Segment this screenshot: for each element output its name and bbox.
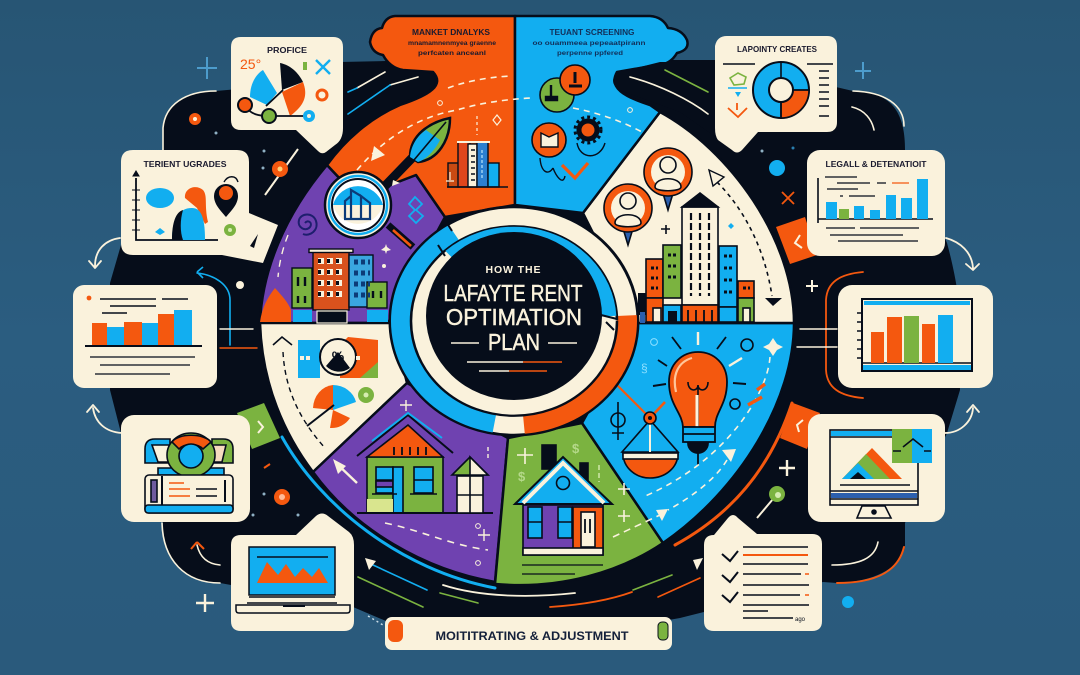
segment: purple bottom — [313, 383, 508, 582]
icon: decorative plus marks and dots — [189, 57, 871, 612]
icon: green panel sparkles — [517, 441, 668, 537]
title underline rules — [451, 343, 577, 371]
hub rings — [380, 198, 648, 444]
panel: laptop card — [231, 514, 354, 631]
heading: market analysis tab: mnamamnenmyea graenne — [408, 41, 497, 47]
panel: right bar chart card — [838, 285, 993, 388]
icon: leaf with stem — [385, 118, 450, 186]
screen chart — [857, 299, 972, 371]
hub centre disc — [426, 232, 602, 400]
icon: scale — [611, 385, 678, 478]
icon: spiral — [299, 214, 317, 235]
icon: dark blobs overlapping the tabs — [340, 62, 720, 150]
black arcs detail — [162, 91, 904, 607]
segment: purple upper left — [260, 165, 445, 323]
title: optimation: OPTIMATION — [446, 304, 582, 330]
icon: bottom arc arrowheads — [191, 267, 703, 625]
monitor icon — [830, 429, 932, 518]
title: plan: PLAN — [488, 329, 540, 355]
heading: market analysis tab: perfcaten anceanl — [418, 51, 486, 57]
icon: lower-left cream panel pie and badge: % — [332, 348, 345, 364]
segment: cream lower left — [260, 323, 407, 472]
icon: dashed path on orange and blue — [357, 76, 642, 170]
checks — [722, 551, 738, 602]
panel: checklist card: ago — [795, 617, 806, 623]
icon: dashed arrows on blue panel — [641, 338, 783, 510]
icon: dashed arrows on blue panel: § — [641, 361, 648, 375]
icon: cream panel people and tower — [604, 148, 754, 323]
icon: dashed arrow on cream — [661, 170, 782, 306]
heading: tenant screening tab: oo ouammeea pepeaatpirann — [532, 41, 646, 47]
panel: central hub — [380, 198, 648, 444]
heading: tenant screening tab: TEUANT SCREENING — [550, 27, 635, 37]
heading: market analysis tab — [408, 27, 497, 57]
heading: profile: PROFICE — [267, 46, 308, 55]
icon: tenant screening symbols — [438, 65, 632, 181]
panel: wheel segments — [260, 16, 794, 585]
panel: profile card — [231, 37, 343, 153]
heading: MOITITRATING & ADJUSTMENT — [436, 629, 629, 643]
panel: monitor card — [808, 414, 945, 522]
heading: LAPOINTY CREATES — [737, 44, 817, 54]
icon: lower-left cream panel pie and badge — [273, 337, 378, 448]
panel: left bar chart card — [73, 285, 217, 388]
icon: road lines on dark blobs — [348, 70, 708, 114]
icon: light bulb — [653, 332, 753, 465]
icon: purple panel buildings — [260, 249, 388, 323]
icon: purple panel dashed arrow — [333, 400, 490, 565]
icon: connector tabs — [237, 217, 820, 449]
icon: buildings on orange — [447, 142, 508, 187]
panel: budget card lower left — [121, 415, 250, 522]
segment: orange tab top left — [327, 16, 515, 217]
panel: tenant upgrades card — [121, 150, 278, 263]
icon: purple panel sparkles — [278, 235, 391, 277]
icon: green panel sparkles: $ — [572, 441, 580, 456]
title: lafayte rent: LAFAYTE RENT — [444, 280, 582, 306]
panel: laf card top right — [715, 36, 837, 152]
laptop icon — [236, 547, 350, 613]
icon: arrows and connectors outside wheel — [87, 238, 979, 433]
dark backdrop blob — [110, 60, 960, 627]
pie chart — [238, 63, 315, 123]
heading: market analysis tab: MANKET DNALYKS — [412, 27, 490, 37]
gauge device icon — [145, 433, 233, 513]
bars — [92, 310, 192, 345]
bar chart — [818, 178, 933, 223]
donut chart — [753, 62, 809, 118]
chart glyph — [132, 171, 258, 248]
segment: green bottom — [495, 423, 663, 585]
icon: green panel house — [515, 445, 612, 574]
segment: cream upper right — [583, 112, 794, 323]
heading: TERIENT UGRADES — [144, 159, 227, 169]
segment: blue tab top right — [515, 16, 688, 213]
text: 25 degrees: 25° — [240, 56, 261, 72]
icon: magnifying glass — [325, 172, 413, 247]
icon: blue glyph on purple — [409, 197, 423, 223]
panel: monitoring and adjustment banner — [385, 617, 672, 650]
icon: green panel sparkles: $ — [518, 469, 526, 484]
icon: white arrowhead — [371, 146, 385, 161]
panel: checklist card — [704, 515, 822, 631]
title: how the: HOW THE — [486, 264, 540, 276]
heading: tenant screening tab: perpenne ppfered — [557, 51, 623, 57]
segment: blue lower right — [582, 323, 794, 543]
icon: orange and green house — [357, 413, 493, 513]
panel: legal card — [807, 150, 945, 256]
lines — [743, 547, 809, 618]
heading: LEGALL & DETENATIOIT — [826, 159, 927, 169]
heading: tenant screening tab — [532, 27, 646, 57]
